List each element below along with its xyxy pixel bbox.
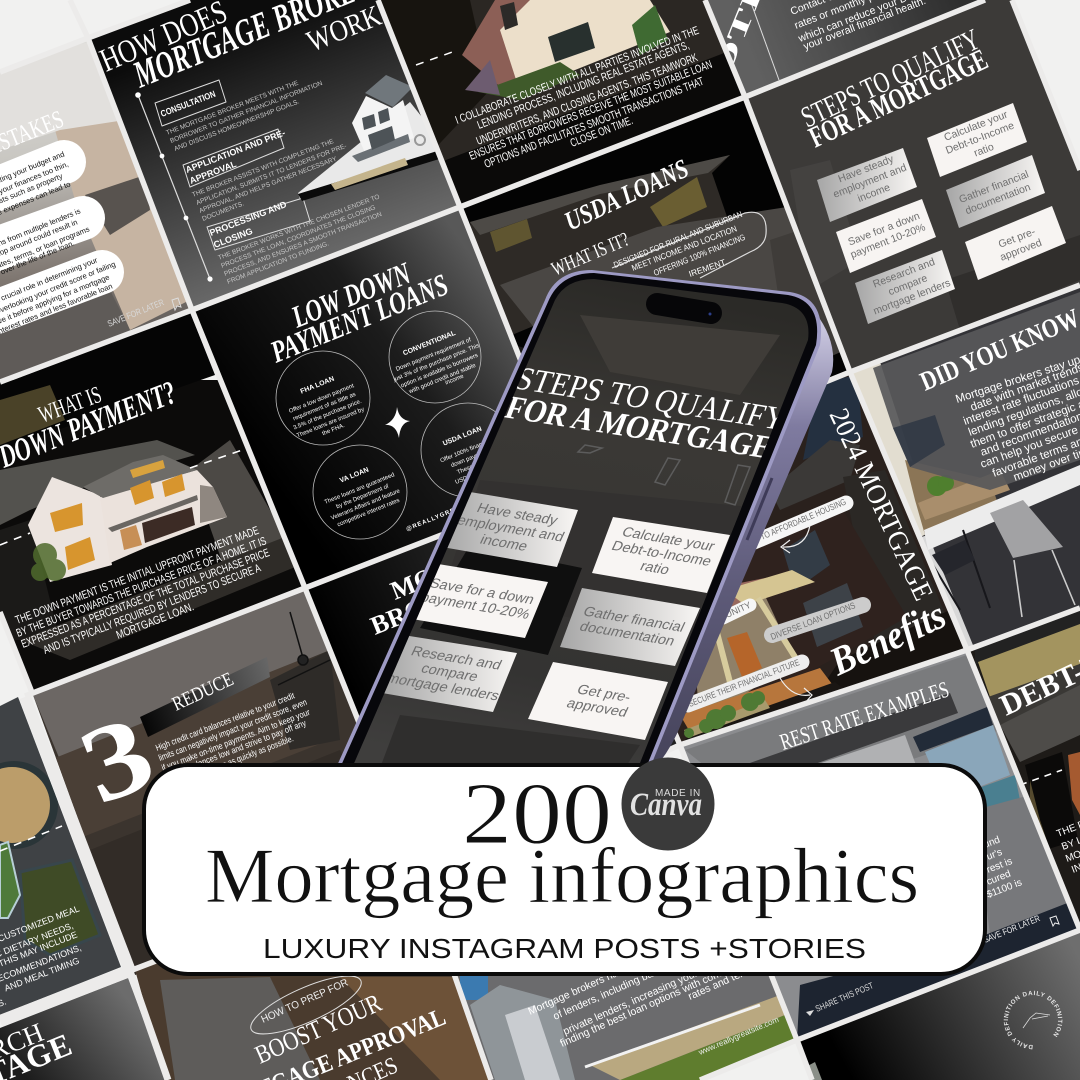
body text: BY THE BUYER TOWARDS THE PURCHASE PRICE OF A HOME. IT IS — [15, 535, 268, 640]
outlined label — [244, 965, 368, 1045]
step: consultation: THE MORTGAGE BROKER MEETS WITH THE — [165, 80, 300, 137]
cards: compare — [887, 272, 929, 298]
heading: DOWN PAYMENT? — [0, 375, 181, 476]
headline number: 200 — [462, 766, 612, 863]
benefit pills: SECURE THEIR FINANCIAL FUTURE — [687, 657, 801, 709]
cards: Have steady — [837, 153, 896, 185]
cards: income — [856, 181, 892, 205]
circle: conventional: Down payment requirement of — [395, 337, 472, 373]
body text: private lenders, increasing your — [561, 967, 700, 1038]
cards: approved — [998, 237, 1044, 264]
body text: THE DOWN PAYMENT IS THE INITIAL UPFRONT PAYMENT MADE — [14, 525, 261, 627]
circle: VA loan: VA LOAN — [339, 467, 370, 485]
body text: ances as quickly as possible. — [207, 733, 295, 775]
headline: Mortgage infographics — [205, 832, 919, 919]
body text: Mortgage brokers have access to — [526, 944, 673, 1018]
cards: Calculate your — [942, 108, 1010, 144]
panel: 2024 mortgage benefits — [565, 370, 970, 750]
share label: SHARE THIS POST — [814, 980, 875, 1014]
screen cards: mortgage lenders — [384, 671, 502, 704]
step: processing — [207, 193, 383, 286]
body text: ur's — [985, 847, 1004, 863]
circle: VA loan: Veterans Affairs and feature — [330, 488, 402, 522]
circle: FHA loan: requirement of as little as — [292, 392, 357, 422]
body text: EXPRESSED AS A PERCENTAGE OF THE TOTAL PURCHASE PRICE — [20, 547, 272, 651]
benefit pills: TO AFFORDABLE HOUSING — [759, 497, 847, 542]
panel: mortgage brokers — [300, 480, 685, 870]
icon: round stamp: DAILY DEFINITION DAILY DEFINITION — [1004, 990, 1062, 1050]
dynamic island — [657, 304, 712, 316]
banner — [144, 758, 985, 974]
icon: pendant lamp — [278, 612, 330, 685]
circle: FHA loan: Offer a low down payment — [288, 383, 355, 415]
heading — [801, 28, 989, 148]
panel: steps to qualify (right) — [740, 0, 1080, 375]
panel: diverse lenders house — [410, 860, 805, 1080]
heading: DTI — [709, 0, 767, 80]
body text: UNDERWRITERS, AND CLOSING AGENTS. THIS TEAMWORK — [475, 52, 700, 148]
cards: ratio — [972, 141, 996, 159]
heading: 2024 mortgage: 2024 MORTGAGE — [823, 404, 939, 605]
screen cards: Research and — [408, 644, 504, 673]
circle: FHA loan: These loans are insured by — [296, 407, 365, 439]
heading: MO — [386, 562, 439, 606]
circle: USDA loan: USDA approved — [455, 464, 497, 486]
panel: dti top — [708, 0, 978, 94]
icon: salad bowl — [20, 860, 100, 955]
subheading: WHAT IS IT? — [548, 228, 633, 281]
circle: conventional: with good credit and stable — [407, 363, 477, 396]
panel: interest rate examples — [675, 640, 1080, 1045]
step: consultation: BORROWER TO GATHER FINANCIAL INFORMATION — [169, 80, 324, 145]
dashed rule — [1020, 770, 1062, 785]
body text — [0, 904, 83, 1011]
screen cards: documentation — [577, 619, 677, 649]
badge: made in canva — [622, 758, 714, 850]
screen cards: employment and — [454, 513, 567, 545]
circle: USDA loan: These loans — [456, 458, 489, 476]
icon: model house on clipboard — [298, 75, 449, 201]
panel: mortgage mistakes — [0, 42, 188, 380]
step: processing: PROCESS, AND ENSURES A SMOOTH TRANSACTION — [223, 211, 383, 278]
circle: VA loan: by the Department of — [336, 484, 390, 510]
benefit pills: UNITY — [724, 600, 752, 620]
step: application: APPLICATION, SUBMITS IT TO LENDERS FOR PRE- — [195, 143, 348, 207]
icon: pasta bowl — [0, 761, 58, 849]
arrow: curved lower — [780, 678, 812, 703]
body text: rest is — [985, 856, 1014, 876]
screen cards: Save for a down — [427, 576, 537, 608]
save for later label: SAVE FOR LATER — [106, 297, 166, 329]
phone frame — [336, 270, 821, 768]
phone bezel — [340, 273, 817, 768]
circle: conventional: income — [445, 373, 465, 386]
screen cards: compare — [418, 661, 481, 685]
circle: VA loan — [313, 445, 407, 539]
label band: REDUCE — [169, 668, 237, 716]
heading: REST RATE EXAMPLES — [777, 677, 952, 755]
pill list — [0, 150, 117, 343]
body text: if you make on-time payments. Aim to keep your — [160, 707, 311, 773]
body text — [982, 835, 1024, 901]
cards — [817, 103, 1066, 324]
step: consultation: CONSULTATION — [159, 89, 217, 119]
circle: conventional: just 3% of the purchase price. This — [392, 343, 480, 383]
step: processing: PROCESSING AND — [208, 199, 288, 238]
outlined description pill: MEET INCOME AND LOCATION — [630, 223, 738, 273]
panel: debt to income — [960, 600, 1080, 935]
label band — [140, 657, 270, 737]
panel: boost approval — [135, 860, 495, 1080]
cards: Get pre- — [997, 226, 1038, 251]
body text: ENSURES THAT BORROWERS RECEIVE THE MOST SUITABLE LOAN — [468, 59, 714, 163]
big number: 3 — [65, 693, 169, 828]
body text: und — [982, 835, 1002, 851]
screen heading: STEPS TO QUALIFY — [510, 361, 792, 438]
badge: made in canva: MADE IN — [655, 788, 701, 799]
step: application: DOCUMENTS. — [201, 200, 245, 223]
outlined description pill: IREMENT. — [687, 257, 728, 279]
step: processing: CLOSING — [212, 226, 254, 250]
panel: collaborate house photo — [381, 0, 742, 204]
circle: conventional: CONVENTIONAL — [402, 330, 457, 357]
cards: payment 10-20% — [849, 221, 927, 261]
cards: employment and — [832, 162, 908, 201]
circle: FHA loan: 3.5% of the purchase price. — [293, 398, 363, 432]
screen cards: Calculate your — [619, 525, 717, 555]
badge: made in canva: Canva — [630, 787, 702, 823]
subheadline: LUXURY INSTAGRAM POSTS +STORIES — [263, 933, 866, 964]
panel: USDA loans — [464, 100, 846, 378]
outlined description pill: DESIGNED FOR RURAL AND SUBURBAN — [612, 209, 744, 270]
outlined label: HOW TO PREP FOR — [259, 976, 350, 1026]
pendant lamps — [578, 445, 750, 505]
heading: WHAT IS — [35, 382, 105, 429]
screen cards: payment 10-20% — [418, 590, 533, 623]
body text: High credit card balances relative to your credit — [154, 690, 296, 753]
circle: VA loan: competitive interest rates — [337, 498, 401, 528]
body text: balances low and strive to pay off any — [187, 718, 308, 772]
heading — [366, 562, 439, 641]
icon: white farmhouse — [28, 455, 227, 582]
heading: benefits: Benefits — [822, 592, 952, 685]
screen cards: Debt-to-Income — [609, 539, 714, 570]
share label — [806, 980, 875, 1016]
screen cards — [382, 492, 730, 740]
screen heading: FOR A MORTGAGE — [500, 390, 778, 466]
body text: OPTIONS AND FACILITATES SMOOTH TRANSACTIONS THAT — [483, 76, 706, 171]
body text — [454, 25, 714, 171]
circle: FHA loan: FHA LOAN — [299, 376, 335, 396]
step: application: APPROVAL, AND HELPS GATHER NECESSARY — [198, 155, 338, 215]
circle: USDA loan: USDA LOAN — [442, 426, 483, 448]
benefit pills — [687, 497, 863, 709]
panel: dark bottom right — [800, 933, 1080, 1080]
benefit pills: DIVERSE LOAN OPTIONS — [769, 600, 857, 642]
cards: Debt-to-Income — [944, 120, 1016, 157]
body text: rates and terms. — [686, 961, 761, 1003]
screen cards: Have steady — [474, 501, 561, 529]
circle: USDA loan: down payment — [450, 449, 489, 469]
cards: documentation — [964, 181, 1032, 217]
step: processing: THE BROKER WORKS WITH THE CHOSEN LENDER TO — [217, 193, 381, 262]
cards: mortgage lenders — [872, 277, 952, 317]
circle: VA loan: These loans are guaranteed — [324, 472, 396, 506]
body text: MORTGAGE LOAN. — [115, 601, 196, 642]
phone side band — [640, 312, 833, 768]
body text — [1055, 816, 1080, 876]
body text — [14, 525, 272, 657]
step: application: APPROVAL — [188, 159, 238, 186]
website label: www.reallygreatsite.com — [696, 1015, 780, 1057]
circle: USDA loan — [420, 402, 496, 496]
body text: of lenders, including banks, — [551, 960, 672, 1023]
body text: limits can negatively impact your credit score, even — [157, 697, 308, 763]
circle: USDA loan: Offer 100% financing — [440, 438, 494, 464]
cards: Save for a down — [846, 210, 922, 248]
heading — [0, 382, 173, 468]
banner box — [144, 765, 985, 974]
save for later label: SAVE FOR LATER — [982, 913, 1042, 945]
heading: BRO — [366, 593, 429, 641]
phone mockup — [336, 270, 833, 770]
step: processing: PROCESS THE LOAN, COORDINATES THE CLOSING — [220, 204, 377, 270]
panel: did you know — [845, 280, 1080, 655]
heading — [98, 0, 383, 88]
heading: PAYMENT LOANS — [265, 267, 453, 370]
heading: USDA LOANS — [560, 153, 693, 236]
dashed rule — [416, 52, 452, 66]
body text: finding the best loan options with com — [558, 967, 723, 1050]
icon: glass container — [0, 842, 20, 918]
step: application — [183, 128, 348, 223]
body text: CLOSE ON TIME. — [569, 115, 635, 150]
screen cards: ratio — [637, 559, 672, 578]
wide gutters — [0, 697, 168, 1080]
body text — [954, 349, 1080, 484]
side button — [747, 478, 772, 540]
cards: Gather financial — [957, 168, 1030, 206]
panel: what is down payment — [0, 312, 310, 700]
body text: AND MEAL TIMING — [3, 956, 81, 993]
panel: low down payment loans — [196, 210, 518, 584]
panel: research mortgage — [0, 975, 170, 1080]
panel: meal plan — [0, 690, 130, 1020]
heading: BOOST YOUR — [251, 988, 386, 1069]
icon: banknotes — [800, 1062, 822, 1080]
heading: FOR A MORTGAGE — [804, 43, 993, 154]
step: application: APPLICATION AND PRE- — [184, 128, 287, 175]
heading — [270, 262, 448, 363]
icon: sparkle — [385, 407, 410, 438]
circle: conventional: option is available to borrowers — [400, 353, 479, 389]
handle: @REALLYGREATSITE — [406, 498, 481, 533]
body text: AND IS TYPICALLY REQUIRED BY LENDERS TO SECURE A — [42, 562, 263, 657]
circle: FHA loan — [276, 351, 370, 445]
timeline — [135, 92, 213, 282]
step: consultation: AND DISCUSS HOMEOWNERSHIP GOALS. — [173, 98, 301, 153]
circle: conventional — [389, 311, 481, 403]
screen cards: approved — [564, 696, 630, 721]
circle: FHA loan: the FHA. — [322, 423, 346, 437]
cards: Research and — [871, 256, 937, 291]
step: application: THE BROKER ASSISTS WITH COMPLETING THE — [191, 138, 335, 199]
phone screen — [340, 270, 820, 770]
screen cards: Get pre- — [574, 682, 634, 706]
porch photo — [680, 570, 845, 745]
heading: LOW DOWN — [286, 255, 417, 335]
panel: reduce — [30, 585, 420, 975]
body text — [526, 944, 761, 1050]
body text: $1100 is — [985, 877, 1024, 901]
outlined description pill: OFFERING 100% FINANCING — [652, 232, 747, 278]
dashed rule — [0, 448, 248, 545]
body text: cured — [985, 869, 1012, 888]
step: processing: FROM APPLICATION TO FUNDING. — [226, 240, 330, 286]
panel: how does mortgage broker work — [80, 0, 470, 315]
body text: LENDING PROCESS, INCLUDING REAL ESTATE AGENTS, — [476, 40, 691, 132]
screen cards: income — [477, 532, 530, 555]
screen heading — [500, 361, 792, 466]
screen cards: Gather financial — [580, 604, 687, 635]
arrow: curved — [781, 525, 810, 553]
